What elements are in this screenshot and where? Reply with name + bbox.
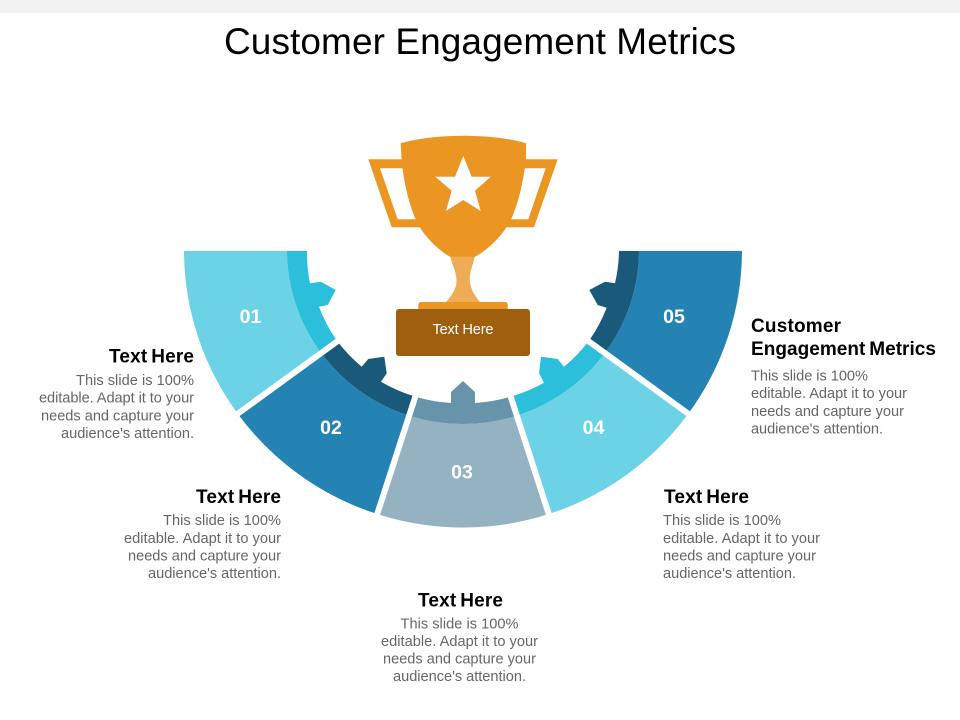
text block 04: Text Here bbox=[664, 487, 749, 508]
icon: star bbox=[435, 156, 491, 211]
number 03: 03 bbox=[451, 462, 473, 484]
text block 01: This slide is 100% bbox=[76, 373, 194, 389]
text block 03: Text Here bbox=[418, 590, 503, 612]
text block 03: needs and capture your bbox=[383, 652, 536, 668]
text block 04: This slide is 100% bbox=[663, 513, 781, 529]
number 01: 01 bbox=[240, 306, 261, 328]
text block 01: audience's attention. bbox=[61, 426, 194, 442]
text block 03: audience's attention. bbox=[393, 669, 526, 685]
text block 02: audience's attention. bbox=[148, 566, 281, 582]
text block 03: This slide is 100% bbox=[400, 616, 519, 632]
number 02: 02 bbox=[320, 417, 342, 439]
segment 03 bbox=[377, 381, 549, 527]
text block 03 bbox=[381, 590, 538, 685]
segment 01 bbox=[184, 251, 337, 413]
text block 05: audience's attention. bbox=[751, 422, 883, 438]
text block 01: editable. Adapt it to your bbox=[39, 390, 194, 406]
segment 02 bbox=[237, 340, 415, 514]
text block 04: needs and capture your bbox=[663, 548, 816, 564]
plaque: Text Here: Text Here bbox=[432, 322, 494, 338]
text block 05 bbox=[751, 316, 936, 438]
text block 02: This slide is 100% bbox=[163, 513, 281, 529]
number 05: 05 bbox=[663, 306, 685, 328]
text block 02: needs and capture your bbox=[128, 548, 281, 564]
number 04: 04 bbox=[583, 417, 604, 439]
title: Customer Engagement Metrics bbox=[224, 21, 736, 62]
icon: trophy bbox=[368, 136, 558, 310]
text block 05: needs and capture your bbox=[751, 404, 904, 420]
text block 05: editable. Adapt it to your bbox=[751, 386, 907, 402]
text block 02: editable. Adapt it to your bbox=[124, 531, 281, 547]
text block 01: needs and capture your bbox=[41, 408, 194, 424]
text block 04 bbox=[663, 487, 820, 582]
tabbed ring 05 bbox=[589, 251, 639, 352]
text block 05: Engagement Metrics bbox=[751, 339, 936, 360]
text block 03: editable. Adapt it to your bbox=[381, 634, 538, 650]
text block 04: audience's attention. bbox=[663, 566, 796, 582]
text block 04: editable. Adapt it to your bbox=[663, 531, 820, 547]
tabbed ring 03 bbox=[409, 381, 517, 424]
segment 04 bbox=[511, 340, 689, 514]
tabbed ring 01 bbox=[287, 251, 337, 352]
tabbed ring 02 bbox=[321, 340, 415, 416]
segment 05 bbox=[589, 251, 742, 413]
plaque: Text Here bbox=[396, 309, 530, 356]
text block 01: Text Here bbox=[109, 346, 194, 368]
text block 02 bbox=[124, 487, 281, 582]
text block 01 bbox=[39, 346, 194, 442]
text block 05: Customer bbox=[751, 316, 842, 337]
tabbed ring 04 bbox=[511, 340, 605, 416]
text block 05: This slide is 100% bbox=[751, 368, 868, 384]
text block 02: Text Here bbox=[196, 487, 281, 508]
